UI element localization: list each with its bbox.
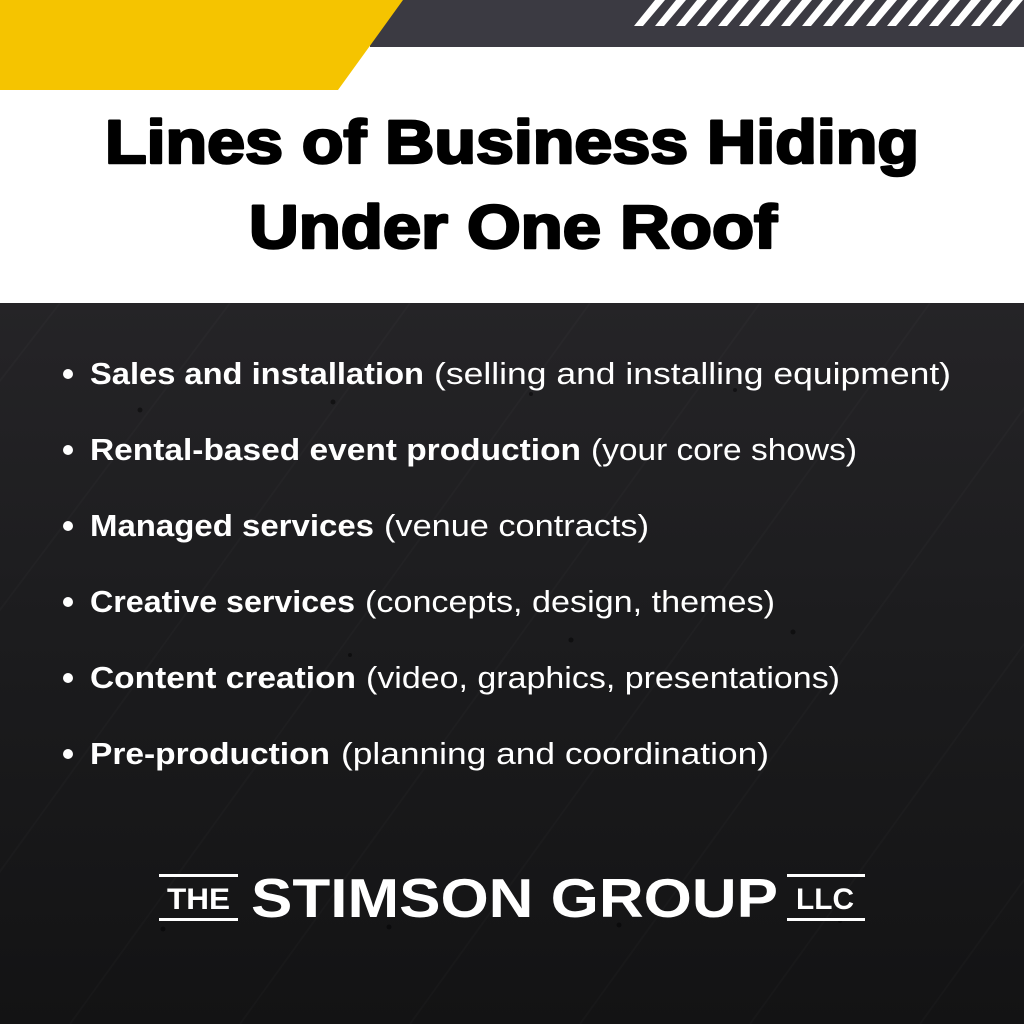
item: content creation xyxy=(63,661,840,695)
title: Lines of Business Hiding xyxy=(105,108,919,176)
item: rental-based event production: Rental-based event production xyxy=(90,433,581,467)
hazard stripes xyxy=(634,0,1023,26)
item: pre-production xyxy=(63,737,769,771)
bullet list xyxy=(63,357,951,771)
item: sales and installation: Sales and installation xyxy=(90,357,424,391)
item: content creation: (video, graphics, presentations) xyxy=(366,661,840,695)
title xyxy=(105,108,919,261)
top header band xyxy=(370,0,1024,47)
item: creative services: (concepts, design, themes) xyxy=(365,585,775,619)
item: managed services: Managed services xyxy=(90,509,374,543)
item: pre-production: (planning and coordination) xyxy=(341,737,769,771)
item: sales and installation xyxy=(63,357,951,391)
dark textured panel xyxy=(0,303,1024,1024)
item: managed services xyxy=(63,509,649,543)
item: creative services xyxy=(63,585,775,619)
logo: The Stimson Group LLC: THE xyxy=(167,883,230,916)
item: pre-production: Pre-production xyxy=(90,737,330,771)
item: rental-based event production: (your core shows) xyxy=(591,433,857,467)
title: Under One Roof xyxy=(249,193,778,261)
item: rental-based event production xyxy=(63,433,857,467)
item: creative services: Creative services xyxy=(90,585,355,619)
logo: The Stimson Group LLC: LLC xyxy=(796,883,854,916)
item: content creation: Content creation xyxy=(90,661,356,695)
item: managed services: (venue contracts) xyxy=(384,509,649,543)
logo: The Stimson Group LLC: STIMSON GROUP xyxy=(251,867,778,929)
logo: The Stimson Group LLC xyxy=(159,867,865,929)
yellow corner shape xyxy=(0,0,403,90)
item: sales and installation: (selling and installing equipment) xyxy=(434,357,951,391)
